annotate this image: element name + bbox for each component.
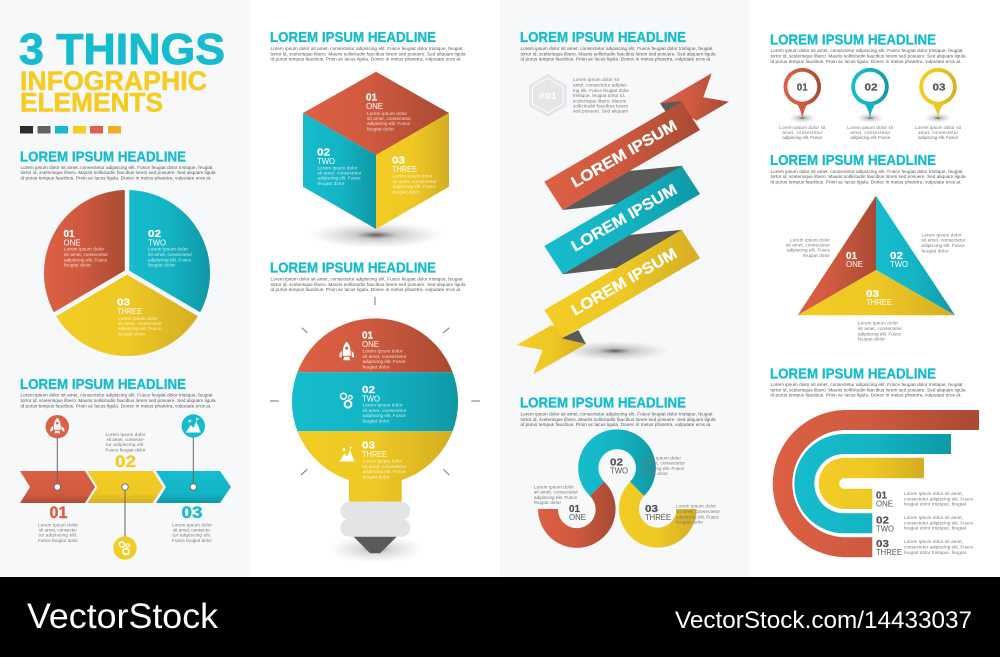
loop diagram: feugiat dolor: [641, 471, 668, 476]
nested arcs diagram: Lorem ipsum dolor sit amet,: [904, 539, 963, 544]
heading: loop section: Lorem ipsum dolor sit amet, consectetur adipiscing elit. Fusce feugiat dolor tristique, feugiat: [520, 412, 713, 417]
pie chart: ONE: [64, 238, 81, 248]
cube diagram: adipiscing elit. Fusce: [318, 176, 361, 180]
nested arcs diagram: feugiat dolor tristique, feugiat: [904, 550, 967, 555]
heading: bulb section: Lorem ipsum dolor sit amet, consectetur adipiscing elit. Fusce feugiat dolor tristique, feugiat: [270, 277, 463, 282]
light bulb diagram: 03: [362, 440, 375, 452]
heading: cube section: Lorem ipsum dolor sit amet, consectetur adipiscing elit. Fusce feugiat dolor tristique, feugiat: [270, 46, 463, 51]
nested arcs diagram: consectetur adipiscing elit. Fusce: [904, 496, 973, 501]
timeline labels: Fusce feugiat dolor: [106, 447, 146, 452]
timeline labels: Lorem ipsum dolor: [172, 522, 212, 528]
loop diagram: Lorem ipsum dolor: [641, 455, 681, 460]
nested arcs diagram: Lorem ipsum dolor sit amet,: [904, 515, 963, 520]
heading: cube section: LOREM IPSUM HEADLINE: [270, 30, 436, 46]
timeline labels: tur adipiscing elit.: [172, 533, 212, 538]
light bulb diagram: Lorem ipsum dolor: [362, 459, 403, 464]
pie chart: feugiat dolor: [148, 263, 175, 268]
timeline labels: Lorem ipsum dolor: [106, 432, 146, 437]
cube diagram: 03: [392, 154, 405, 166]
icon: rocket: [340, 342, 354, 360]
pie chart: feugiat dolor: [118, 331, 145, 336]
heading: nested arcs section: Lorem ipsum dolor sit amet, consectetur adipiscing elit. Fusce feugiat dolor tristique, feugiat: [770, 382, 963, 387]
heading: timeline section: Lorem ipsum dolor sit amet, consectetur adipiscing elit. Fusce feugiat dolor tristique, feugiat: [20, 392, 213, 398]
cube diagram: feugiat dolor: [392, 190, 420, 194]
light bulb diagram: feugiat dolor: [362, 419, 390, 424]
pie chart: Lorem ipsum dolor: [148, 247, 188, 252]
loop diagram: feugiat dolor: [676, 520, 703, 525]
bulb rays: [270, 297, 480, 475]
loop diagram: Lorem ipsum dolor: [676, 504, 716, 509]
timeline labels: Fusce feugiat dolor: [38, 538, 78, 543]
light bulb diagram: adipiscing elit. Fusce: [362, 359, 406, 364]
ribbon graphic: LOREM IPSUM: [568, 245, 680, 319]
heading: triangle section: id purus tempus faucibus. Proin ac lacus ligula. Donec in metus pharetra, vulputate eros at.: [770, 179, 962, 184]
ribbon graphic: [517, 73, 729, 374]
heading: nested arcs section: id purus tempus faucibus. Proin ac lacus ligula. Donec in metus pharetra, vulputate eros at.: [770, 393, 962, 398]
light bulb diagram: Lorem ipsum dolor: [362, 403, 403, 408]
heading: pins section: [770, 32, 966, 64]
pie chart: adipiscing elit. Fusce: [118, 326, 161, 331]
icon: rocket badge: [46, 415, 69, 438]
pie chart: 01: [64, 228, 75, 240]
timeline labels: 01: [50, 503, 68, 522]
timeline labels: 02: [115, 452, 136, 471]
triangle diagram: Lorem ipsum dolor: [858, 321, 898, 326]
icon: gears badge: [113, 536, 137, 560]
light bulb diagram: THREE: [362, 449, 387, 459]
pie chart: TWO: [148, 238, 166, 248]
cube diagram: [303, 72, 449, 229]
heading: bulb section: tortor id, scelerisque libero. Mauris sollicitudin faucibus lorem sed posuere. Sed aliquam ligula: [270, 282, 466, 287]
heading: pins section: tortor id, scelerisque libero. Mauris sollicitudin faucibus lorem sed posuere. Sed aliquam ligula: [770, 54, 966, 58]
pin 03: Lorem ipsum dolor sit: [915, 125, 962, 130]
heading: pie section: [20, 150, 216, 181]
cube diagram: feugiat dolor: [318, 181, 345, 186]
heading: ribbon section: id purus tempus faucibus. Proin ac lacus ligula. Donec in metus pharetra, vulputate eros at.: [520, 56, 712, 62]
pin 03: adipiscing elit. Fusce: [918, 135, 958, 140]
hexagon badge and note: scelerisque libero. Mauris: [573, 98, 627, 103]
heading: nested arcs section: [770, 366, 966, 398]
triangle diagram: 01: [846, 250, 857, 262]
pin 01: 01: [797, 82, 808, 93]
cube diagram: Lorem ipsum dolor: [392, 174, 433, 179]
title block: 3 THINGS: [19, 25, 225, 74]
heading: timeline section: tortor id, scelerisque libero. Mauris sollicitudin faucibus lorem sed posuere. Sed aliquam ligula: [20, 398, 216, 403]
triangle diagram: adipiscing elit. Fusce: [922, 243, 965, 248]
cube diagram: sit amet, consectetur: [318, 170, 362, 176]
heading: nested arcs section: tortor id, scelerisque libero. Mauris sollicitudin faucibus lorem sed posuere. Sed aliquam ligula: [770, 387, 966, 392]
colour swatches: [20, 126, 121, 134]
cube shadow: [308, 222, 444, 248]
light bulb diagram: 02: [362, 384, 375, 396]
loop diagram: adipiscing elit. Fusce: [641, 466, 684, 471]
triangle diagram: Lorem ipsum dolor: [922, 233, 962, 238]
pin 03: amet, consectetur: [918, 130, 958, 135]
light bulb diagram: feugiat dolor: [362, 475, 390, 480]
triangle diagram: sit amet, consectetur: [858, 326, 902, 331]
timeline arrows: [20, 437, 231, 537]
nested arcs diagram: 03: [876, 538, 889, 550]
pie chart: sit amet, consectetur: [148, 252, 192, 257]
heading: nested arcs section: LOREM IPSUM HEADLINE: [770, 366, 936, 382]
nested arcs diagram: feugiat dolor tristique, feugiat: [904, 526, 967, 531]
heading: ribbon section: tortor id, scelerisque libero. Mauris sollicitudin faucibus lorem sed posuere. Sed aliquam ligula: [520, 51, 716, 56]
heading: bulb section: [270, 261, 466, 292]
loop diagram: feugiat dolor: [534, 500, 561, 505]
triangle diagram: [786, 196, 966, 342]
heading: pie section: LOREM IPSUM HEADLINE: [20, 150, 186, 166]
pin 01: amet, consectetur: [782, 130, 823, 135]
cube diagram: sit amet, consectetur: [367, 116, 411, 121]
pin 02: amet, consectetur: [850, 130, 891, 135]
title block: [19, 25, 225, 118]
cube diagram: ONE: [366, 101, 383, 111]
loop diagram: 01: [569, 503, 580, 515]
pie chart: feugiat dolor: [64, 263, 91, 268]
loop diagram: 03: [645, 503, 658, 515]
pie chart: 02: [148, 228, 161, 240]
timeline labels: tur adipiscing elit.: [106, 442, 145, 447]
pin 02: Lorem ipsum dolor sit: [847, 125, 894, 130]
light bulb diagram: adipiscing elit. Fusce: [362, 469, 406, 474]
hexagon badge and note: Lorem ipsum dolor sit: [573, 77, 620, 82]
nested arcs diagram: 02: [876, 514, 889, 526]
pin 01: adipiscing elit. Fusce: [782, 135, 823, 140]
heading: pie section: Lorem ipsum dolor sit amet, consectetur adipiscing elit. Fusce feugiat dolor tristique, feugiat: [20, 165, 213, 170]
light bulb diagram: ONE: [362, 339, 379, 349]
heading: triangle section: [770, 153, 966, 184]
nested arcs diagram: consectetur adipiscing elit. Fusce: [904, 520, 973, 525]
cube diagram: adipiscing elit. Fusce: [367, 121, 410, 126]
cube diagram: feugiat dolor: [367, 126, 394, 132]
pin 01: [779, 68, 826, 140]
triangle diagram: sit amet, consectetur: [922, 238, 966, 243]
loop diagram: ONE: [569, 512, 586, 522]
pie chart: Lorem ipsum dolor: [64, 247, 104, 252]
loop diagram: TWO: [610, 466, 628, 476]
loop diagram: Lorem ipsum dolor: [534, 484, 574, 489]
heading: timeline section: [20, 377, 216, 408]
heading: bulb section: id purus tempus faucibus. Proin ac lacus ligula. Donec in metus pharetra, vulputate eros at.: [270, 287, 462, 292]
timeline labels: Fusce feugiat dolor: [172, 538, 212, 543]
triangle diagram: feugiat dolor: [858, 337, 885, 342]
hexagon badge and note: ing elit. Fusce feugiat dolor: [573, 88, 629, 93]
timeline labels: [38, 432, 212, 543]
footer bar: VectorStock: [27, 597, 219, 636]
hexagon badge and note: sollicitudin faucibus lorem: [573, 104, 628, 109]
heading: timeline section: LOREM IPSUM HEADLINE: [20, 377, 186, 393]
icon: mountain: [340, 446, 354, 462]
heading: cube section: tortor id, scelerisque libero. Mauris sollicitudin faucibus lorem sed posuere. Sed aliquam ligula: [270, 51, 466, 56]
loop diagram: THREE: [645, 512, 671, 522]
pie chart: sit amet, consectetur: [64, 252, 108, 257]
footer bar: [0, 577, 1000, 657]
cube diagram: Lorem ipsum dolor: [367, 111, 407, 116]
heading: triangle section: LOREM IPSUM HEADLINE: [770, 153, 936, 169]
heading: bulb section: LOREM IPSUM HEADLINE: [270, 261, 436, 277]
heading: pins section: LOREM IPSUM HEADLINE: [770, 32, 936, 48]
pin 01: Lorem ipsum dolor sit: [779, 125, 826, 130]
light bulb diagram: adipiscing elit. Fusce: [362, 413, 406, 418]
pie chart: 03: [117, 296, 130, 308]
hexagon badge and note: [529, 74, 629, 117]
pin 02: [847, 68, 894, 140]
heading: ribbon section: Lorem ipsum dolor sit amet, consectetur adipiscing elit. Fusce feugiat dolor tristique, feugiat: [520, 46, 713, 51]
title block: INFOGRAPHIC: [20, 66, 207, 96]
pie chart: THREE: [117, 306, 142, 316]
timeline labels: Lorem ipsum dolor: [38, 522, 78, 528]
nested arcs diagram: feugiat dolor tristique, feugiat: [904, 502, 967, 507]
triangle diagram: feugiat dolor: [922, 248, 949, 253]
heading: pins section: id purus tempus faucibus. Proin ac lacus ligula. Donec in metus pharetra, vulputate eros at.: [770, 59, 962, 64]
icon: gears: [340, 393, 352, 408]
pie chart: sit amet, consectetur: [118, 321, 162, 326]
light bulb diagram: feugiat dolor: [362, 365, 390, 370]
heading: triangle section: tortor id, scelerisque libero. Mauris sollicitudin faucibus lorem sed posuere. Sed aliquam ligula: [770, 174, 966, 179]
nested arcs diagram: [773, 410, 979, 557]
triangle diagram: 03: [866, 288, 879, 300]
triangle diagram: adipiscing elit. Fusce: [787, 248, 830, 253]
loop diagram: [534, 429, 720, 548]
heading: pie section: id purus tempus faucibus. Proin ac lacus ligula. Donec in metus pharetra, vulputate eros at.: [20, 176, 212, 181]
nested arcs diagram: TWO: [876, 524, 894, 534]
loop diagram: sit amet, consectetur: [534, 490, 578, 495]
nested arcs diagram: 01: [876, 490, 887, 502]
timeline labels: 03: [182, 503, 202, 522]
ribbon shadow: [560, 341, 670, 361]
heading: loop section: LOREM IPSUM HEADLINE: [520, 395, 686, 411]
pin 03: [915, 68, 962, 140]
heading: triangle section: Lorem ipsum dolor sit amet, consectetur adipiscing elit. Fusce feugiat dolor tristique, feugiat: [770, 169, 963, 174]
loop diagram: sit amet, consectetur: [676, 509, 720, 514]
ribbon graphic: LOREM IPSUM: [568, 117, 680, 191]
heading: timeline section: id purus tempus faucibus. Proin ac lacus ligula. Donec in metus pharetra, vulputate eros at.: [20, 403, 212, 408]
ribbon graphic: LOREM IPSUM: [568, 181, 680, 255]
cube diagram: Lorem ipsum dolor: [318, 166, 358, 170]
cube diagram: THREE: [392, 164, 417, 174]
light bulb diagram: TWO: [362, 394, 380, 404]
nested arcs diagram: consectetur adipiscing elit. Fusce: [904, 545, 973, 550]
triangle diagram: THREE: [866, 297, 892, 307]
pie chart: adipiscing elit. Fusce: [64, 257, 107, 262]
cube diagram: TWO: [317, 156, 335, 166]
triangle diagram: ONE: [846, 259, 863, 269]
light bulb diagram: 01: [362, 330, 373, 342]
triangle diagram: feugiat dolor: [803, 253, 830, 258]
pin 02: 02: [864, 82, 878, 93]
light bulb diagram: sit amet, consectetur: [362, 354, 407, 359]
bulb shadow: [328, 535, 424, 563]
triangle diagram: adipiscing elit. Fusce: [858, 331, 901, 336]
loop diagram: adipiscing elit. Fusce: [676, 514, 719, 519]
triangle diagram: TWO: [890, 259, 908, 269]
cube diagram: 02: [317, 146, 330, 158]
heading: ribbon section: [520, 30, 716, 62]
title block: ELEMENTS: [20, 88, 163, 118]
loop diagram: sit amet, consectetur: [641, 461, 685, 466]
heading: cube section: [270, 30, 466, 62]
cube diagram: adipiscing elit. Fusce: [392, 184, 436, 189]
icon: mountain badge: [182, 414, 205, 438]
pie chart: Lorem ipsum dolor: [118, 316, 158, 321]
hexagon badge and note: sed posuere. Sed aliquam: [573, 109, 628, 114]
pin 03: 03: [932, 82, 946, 93]
triangle diagram: Lorem ipsum dolor: [790, 238, 830, 243]
heading: loop section: id purus tempus faucibus. Proin ac lacus ligula. Donec in metus pharetra, vulputate eros at.: [520, 422, 712, 427]
cube diagram: 01: [366, 92, 377, 104]
cube diagram: sit amet, consectetur: [392, 179, 437, 184]
heading: loop section: tortor id, scelerisque libero. Mauris sollicitudin faucibus lorem sed posuere. Sed aliquam ligula: [520, 417, 716, 422]
timeline labels: sit amet, consecte-: [106, 437, 145, 442]
heading: ribbon section: LOREM IPSUM HEADLINE: [520, 30, 686, 46]
triangle diagram: 02: [890, 250, 903, 262]
timeline labels: sit amet, consecte-: [39, 528, 77, 533]
nested arcs diagram: Lorem ipsum dolor sit amet,: [904, 491, 963, 496]
light bulb diagram: sit amet, consectetur: [362, 464, 407, 469]
loop diagram: adipiscing elit. Fusce: [534, 495, 577, 500]
heading: pie section: tortor id, scelerisque libero. Mauris sollicitudin faucibus lorem sed posuere. Sed aliquam ligula: [20, 170, 216, 175]
pin 02: adipiscing elit. Fusce: [850, 135, 891, 140]
pie chart: [44, 188, 210, 356]
light bulb diagram: sit amet, consectetur: [362, 408, 407, 413]
footer bar: VectorStock.com/14433037: [675, 607, 972, 634]
triangle diagram: sit amet, consectetur: [786, 243, 830, 248]
heading: pins section: Lorem ipsum dolor sit amet, consectetur adipiscing elit. Fusce feugiat dolor tristique, feugiat: [770, 48, 963, 53]
heading: loop section: [520, 395, 716, 427]
hexagon badge and note: tristique, feugiat tortor id,: [573, 93, 625, 98]
hexagon badge and note: #01: [539, 91, 557, 101]
hexagon badge and note: amet, consectetur adipisc-: [573, 83, 628, 88]
heading: cube section: id purus tempus faucibus. Proin ac lacus ligula. Donec in metus pharetra, vulputate eros at.: [270, 56, 462, 62]
pie chart: adipiscing elit. Fusce: [148, 257, 191, 262]
light bulb diagram: Lorem ipsum dolor: [362, 349, 403, 354]
nested arcs diagram: THREE: [876, 547, 902, 557]
timeline labels: sit amet, consecte-: [173, 528, 211, 533]
nested arcs diagram: ONE: [876, 499, 893, 509]
light bulb diagram: [292, 318, 458, 553]
timeline labels: tur adipiscing elit.: [38, 533, 78, 538]
loop diagram: 02: [610, 456, 623, 468]
